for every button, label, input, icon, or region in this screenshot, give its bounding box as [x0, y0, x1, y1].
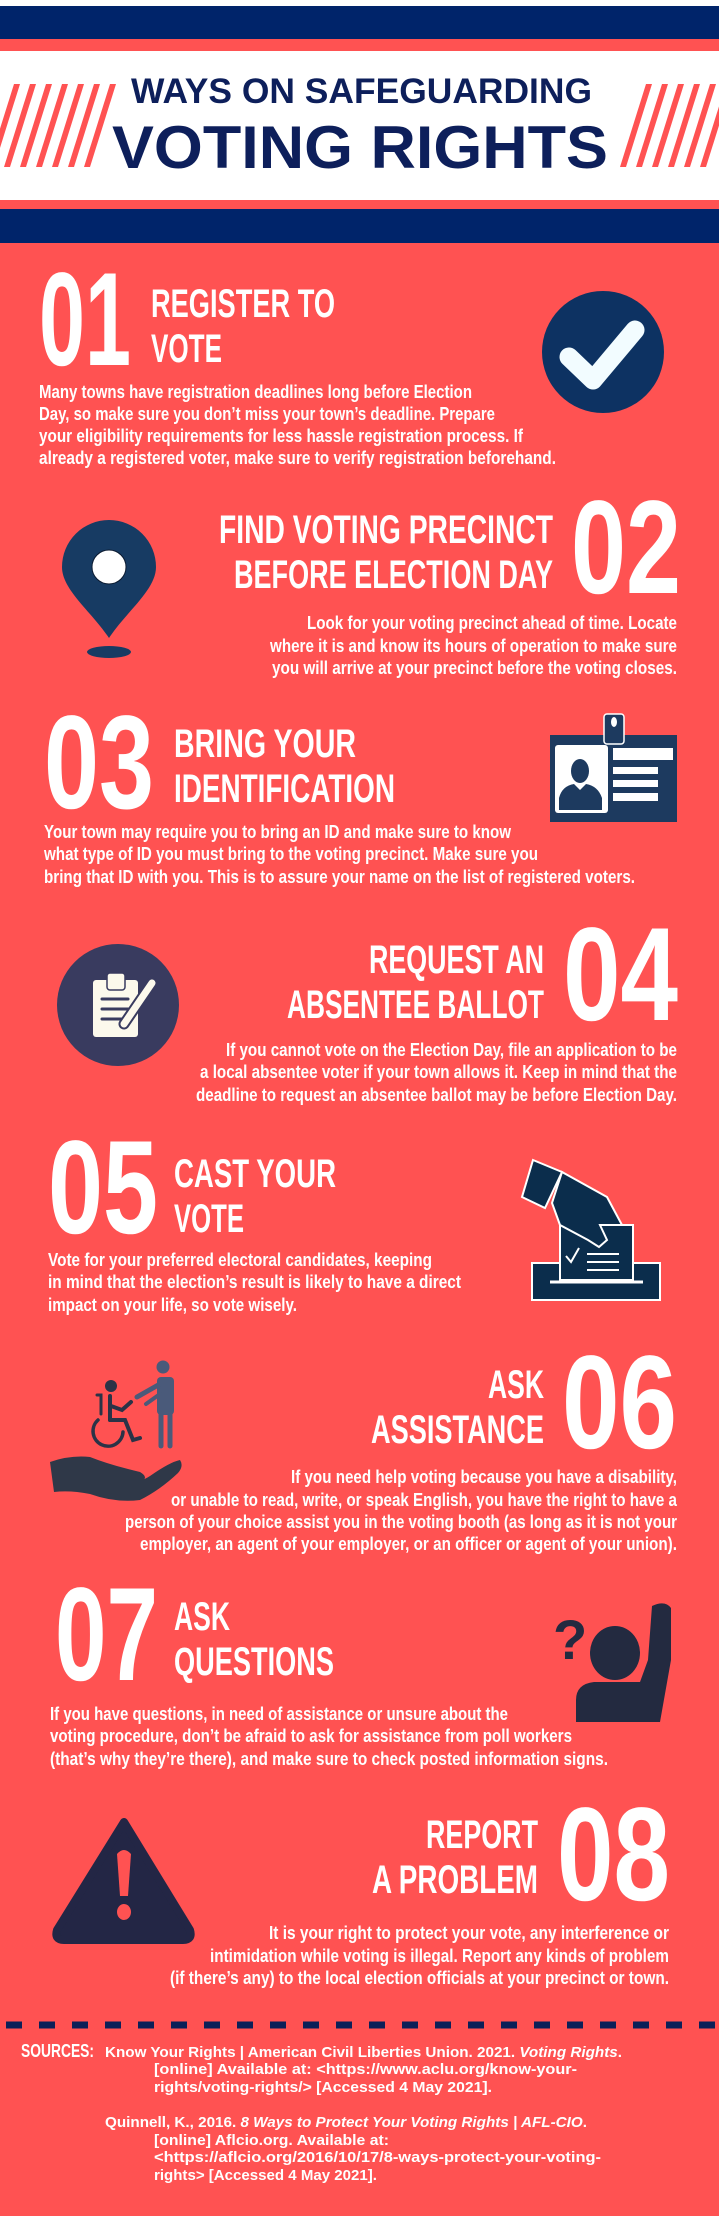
title: VOTING RIGHTS [112, 114, 608, 181]
icon: raised hand question: ? [553, 1608, 587, 1671]
step 03: bring identification [43, 689, 677, 887]
icon: clipboard [57, 944, 179, 1066]
step 03: bring identification: IDENTIFICATION [174, 767, 395, 811]
step 03: bring identification: what type of ID you must bring to the voting precinct. Make sure you [43, 844, 538, 864]
title [112, 72, 608, 181]
step 01: register to vote: already a registered voter, make sure to verify registration beforehand. [39, 448, 556, 468]
step 06: ask assistance: 06 [562, 1329, 677, 1477]
sources: SOURCES: [21, 2041, 94, 2061]
sources [21, 2041, 622, 2184]
step 01: register to vote: your eligibility requirements for less hassle registration process. If [39, 426, 524, 446]
step 08: report a problem: A PROBLEM [372, 1858, 538, 1902]
icon: checkmark [542, 291, 664, 413]
step 06: ask assistance: ASSISTANCE [371, 1408, 544, 1452]
step 06: ask assistance [50, 1329, 678, 1554]
step 02: find voting precinct [62, 474, 681, 678]
step 07: ask questions [50, 1561, 671, 1769]
sources: [online] Available at: <https://www.aclu.org/know-your- [154, 2061, 577, 2078]
sources: rights> [Accessed 4 May 2021]. [154, 2167, 377, 2184]
step 07: ask questions: If you have questions, in need of assistance or unsure about the [50, 1704, 508, 1724]
icon: location pin [62, 520, 156, 658]
sources: Quinnell, K., 2016. 8 Ways to Protect Your Voting Rights | AFL-CIO . [105, 2114, 587, 2131]
sources: [online] Aflcio.org. Available at: [154, 2132, 389, 2149]
step 02: find voting precinct: FIND VOTING PRECINCT [219, 508, 553, 552]
step 05: cast your vote: VOTE [174, 1197, 244, 1241]
title: WAYS ON SAFEGUARDING [131, 72, 592, 111]
step 05: cast your vote [48, 1114, 660, 1315]
step 07: ask questions: ASK [174, 1595, 230, 1639]
sources: Know Your Rights | American Civil Liberties Union. 2021. Voting Rights. [105, 2044, 622, 2061]
icon: ID card [550, 714, 677, 822]
step 04: absentee ballot: 04 [563, 901, 678, 1049]
step 05: cast your vote: Vote for your preferred electoral candidates, keeping [48, 1250, 432, 1270]
step 05: cast your vote: 05 [48, 1114, 158, 1262]
step 04: absentee ballot: REQUEST AN [369, 938, 544, 982]
step 01: register to vote [39, 246, 664, 468]
step 07: ask questions: QUESTIONS [174, 1640, 334, 1684]
step 05: cast your vote: CAST YOUR [174, 1152, 336, 1196]
sources: <https://aflcio.org/2016/10/17/8-ways-protect-your-voting- [154, 2149, 601, 2166]
step 05: cast your vote: impact on your life, so vote wisely. [48, 1295, 297, 1315]
step 06: ask assistance: ASK [488, 1363, 544, 1407]
step 02: find voting precinct: 02 [571, 474, 681, 622]
step 01: register to vote: Many towns have registration deadlines long before Election [39, 382, 472, 402]
step 08: report a problem: 08 [557, 1781, 670, 1929]
icon: assistance hand [50, 1360, 182, 1501]
icon: raised hand question [553, 1603, 671, 1722]
step 01: register to vote: VOTE [151, 327, 222, 371]
step 03: bring identification: Your town may require you to bring an ID and make sure to know [44, 822, 512, 842]
step 08: report a problem: REPORT [426, 1813, 538, 1857]
sources: rights/voting-rights/> [Accessed 4 May 2021]. [154, 2079, 492, 2096]
header banner [0, 0, 719, 243]
step 07: ask questions: 07 [55, 1561, 158, 1709]
step 01: register to vote: 01 [39, 246, 131, 394]
step 04: absentee ballot: ABSENTEE BALLOT [287, 983, 544, 1027]
step 08: report a problem [56, 1781, 670, 1988]
step 05: cast your vote: in mind that the election’s result is likely to have a direct [48, 1272, 461, 1292]
icon: ballot box [522, 1160, 660, 1300]
step 03: bring identification: BRING YOUR [174, 722, 356, 766]
step 07: ask questions: voting procedure, don’t be afraid to ask for assistance from poll workers [50, 1726, 572, 1746]
step 07: ask questions: (that’s why they’re there), and make sure to check posted information signs. [50, 1749, 608, 1769]
step 03: bring identification: 03 [44, 689, 154, 837]
step 01: register to vote: Day, so make sure you don’t miss your town’s deadline. Prepare [39, 404, 495, 424]
icon: warning triangle [56, 1822, 191, 1940]
step 02: find voting precinct: BEFORE ELECTION DAY [234, 553, 553, 597]
step 01: register to vote: REGISTER TO [151, 282, 335, 326]
step 04: absentee ballot [57, 901, 678, 1105]
